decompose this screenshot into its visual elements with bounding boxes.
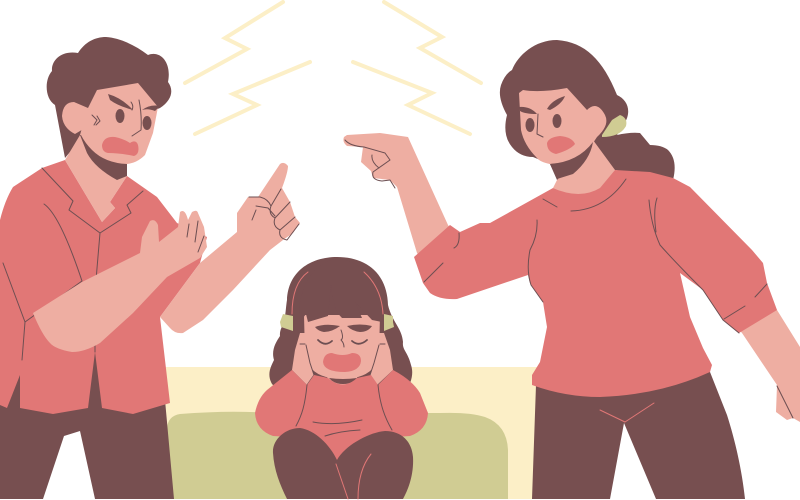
woman nose	[537, 114, 543, 137]
child hands	[292, 333, 393, 385]
bolt: upper left	[185, 2, 283, 83]
child hair ties	[280, 314, 394, 331]
man beard	[80, 135, 127, 180]
woman eyes	[526, 118, 534, 132]
woman wrist line	[777, 386, 793, 418]
man eyebrows	[108, 94, 160, 111]
bolt: lower left	[195, 62, 310, 134]
child hand outlines	[300, 344, 385, 385]
child mouth	[323, 353, 361, 372]
woman eyebrows	[519, 96, 565, 114]
man front arm and hand	[33, 211, 207, 352]
bolt: upper right	[384, 2, 481, 83]
woman mouth	[547, 136, 575, 154]
woman face	[519, 88, 606, 164]
lightning bolts	[185, 2, 481, 134]
sofa seat	[167, 412, 508, 499]
child neck	[326, 376, 358, 389]
man eyes	[116, 109, 124, 123]
child sweater folds	[296, 385, 392, 436]
sofa back	[165, 367, 537, 499]
woman trousers	[532, 372, 745, 499]
woman sweater lines	[424, 179, 767, 333]
man front hand lines	[187, 221, 204, 252]
child face	[304, 315, 380, 378]
figure: child	[255, 257, 428, 499]
man trousers	[0, 350, 174, 499]
woman sweater	[414, 170, 777, 397]
woman right forearm	[732, 300, 800, 422]
woman pointing arm and hand	[343, 133, 458, 268]
man mouth	[102, 137, 138, 156]
man ear	[62, 102, 90, 134]
child hair highlights	[292, 272, 383, 314]
man shirt lines	[3, 168, 143, 360]
man shirt	[0, 160, 207, 414]
figure: man	[0, 37, 300, 499]
man pointing hand lines	[249, 189, 299, 240]
woman hair and ponytail	[500, 40, 675, 180]
child sweater	[255, 370, 428, 470]
woman trouser crease	[600, 403, 654, 422]
man nose and frown lines	[92, 100, 141, 136]
child nose	[341, 330, 344, 347]
child eyebrows	[315, 324, 372, 332]
child neck shadow	[329, 378, 357, 384]
child legs	[273, 428, 413, 499]
child leg highlights	[336, 454, 371, 499]
woman hand lines	[345, 140, 395, 188]
man face	[80, 83, 158, 164]
man far arm and pointing hand	[160, 163, 300, 333]
man neck	[65, 135, 127, 222]
man hair back	[47, 37, 171, 158]
figure: woman	[343, 40, 800, 499]
woman neck	[553, 140, 615, 195]
child hair back	[269, 257, 412, 392]
woman hair tie	[602, 115, 626, 137]
woman neck shadow	[550, 142, 593, 179]
bolt: lower right	[353, 62, 470, 134]
child fringe	[299, 259, 382, 322]
child closed eyes	[318, 340, 367, 344]
